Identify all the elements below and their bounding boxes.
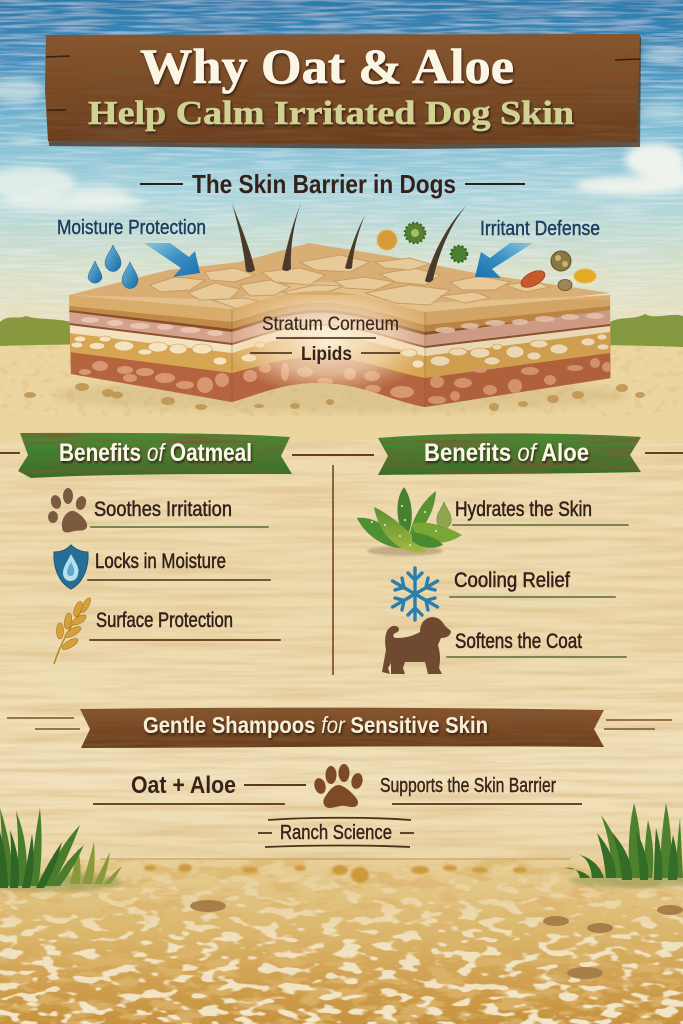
text: oat + aloe: Oat + Aloe [131,772,236,799]
label: lipids: Lipids [301,344,352,365]
pebbles below the block [24,383,645,411]
title line 1: Why Oat & Aloe [140,38,514,94]
heading: skin barrier: The Skin Barrier in Dogs [192,169,456,199]
arrow: irritants blocked [475,243,533,278]
label: stratum corneum: Stratum Corneum [262,314,399,335]
icon: paw [48,488,88,532]
background: ground [0,859,683,1024]
layer: stratum corneum [69,303,610,332]
banner: benefits of oatmeal: Benefits of Oatmeal [59,439,252,467]
label: moisture protection: Moisture Protection [57,217,206,239]
background: parchment [0,300,683,900]
item: soothes irritation: Soothes Irritation [94,498,232,521]
diagram: skin cross-section block [50,243,630,420]
icon: irritant particles [377,223,596,291]
center glow behind labels [232,295,425,400]
text: ranch science [258,818,414,847]
banner: benefits of aloe: Benefits of Aloe [424,439,589,467]
text: ranch science: Ranch Science [280,822,392,844]
skin layers [69,290,611,407]
background: sky [0,0,683,345]
item: surface protection: Surface Protection [96,609,233,632]
grass: right [564,803,683,888]
layer: red dermis [70,352,610,407]
icon: shield with drop [54,545,88,589]
layer: lipids [70,332,610,407]
banner: gentle shampoos: Gentle Shampoos for Sensitive Skin [143,712,488,738]
label: irritant defense: Irritant Defense [480,218,600,240]
icon: water drops [88,245,138,288]
banner: benefits of aloe [378,433,641,475]
panel: oatmeal benefits [48,488,280,664]
background: sand under the skin block [0,343,683,440]
panel: aloe benefits [357,487,628,674]
item: cooling relief: Cooling Relief [454,569,570,592]
background: distant grass strips [0,314,683,349]
item: hydrates the skin: Hydrates the Skin [455,498,592,521]
layer: cream band [70,325,610,407]
arrow: moisture in [144,243,200,277]
item: softens the coat: Softens the Coat [455,630,582,653]
icon: aloe plant [357,487,462,556]
icon: snowflake [392,568,438,620]
text: supports the skin barrier: Supports the Skin Barrier [380,775,556,797]
icon: dog silhouette [382,617,451,674]
section divider [0,453,683,675]
banner: benefits of oatmeal [18,433,292,478]
item: locks in moisture: Locks in Moisture [95,550,226,573]
skin top surface [69,243,610,312]
title line 2: Help Calm Irritated Dog Skin [88,95,574,132]
label: lipids [250,338,400,365]
icon: oat sprig [54,597,92,664]
banner: gentle shampoos [7,708,672,748]
layer: pink epidermis [70,310,610,346]
title board [45,34,641,149]
icon: center paw [313,764,364,808]
icon: aloe drop [437,502,451,528]
hairs [232,203,466,282]
grass: left [0,808,122,891]
